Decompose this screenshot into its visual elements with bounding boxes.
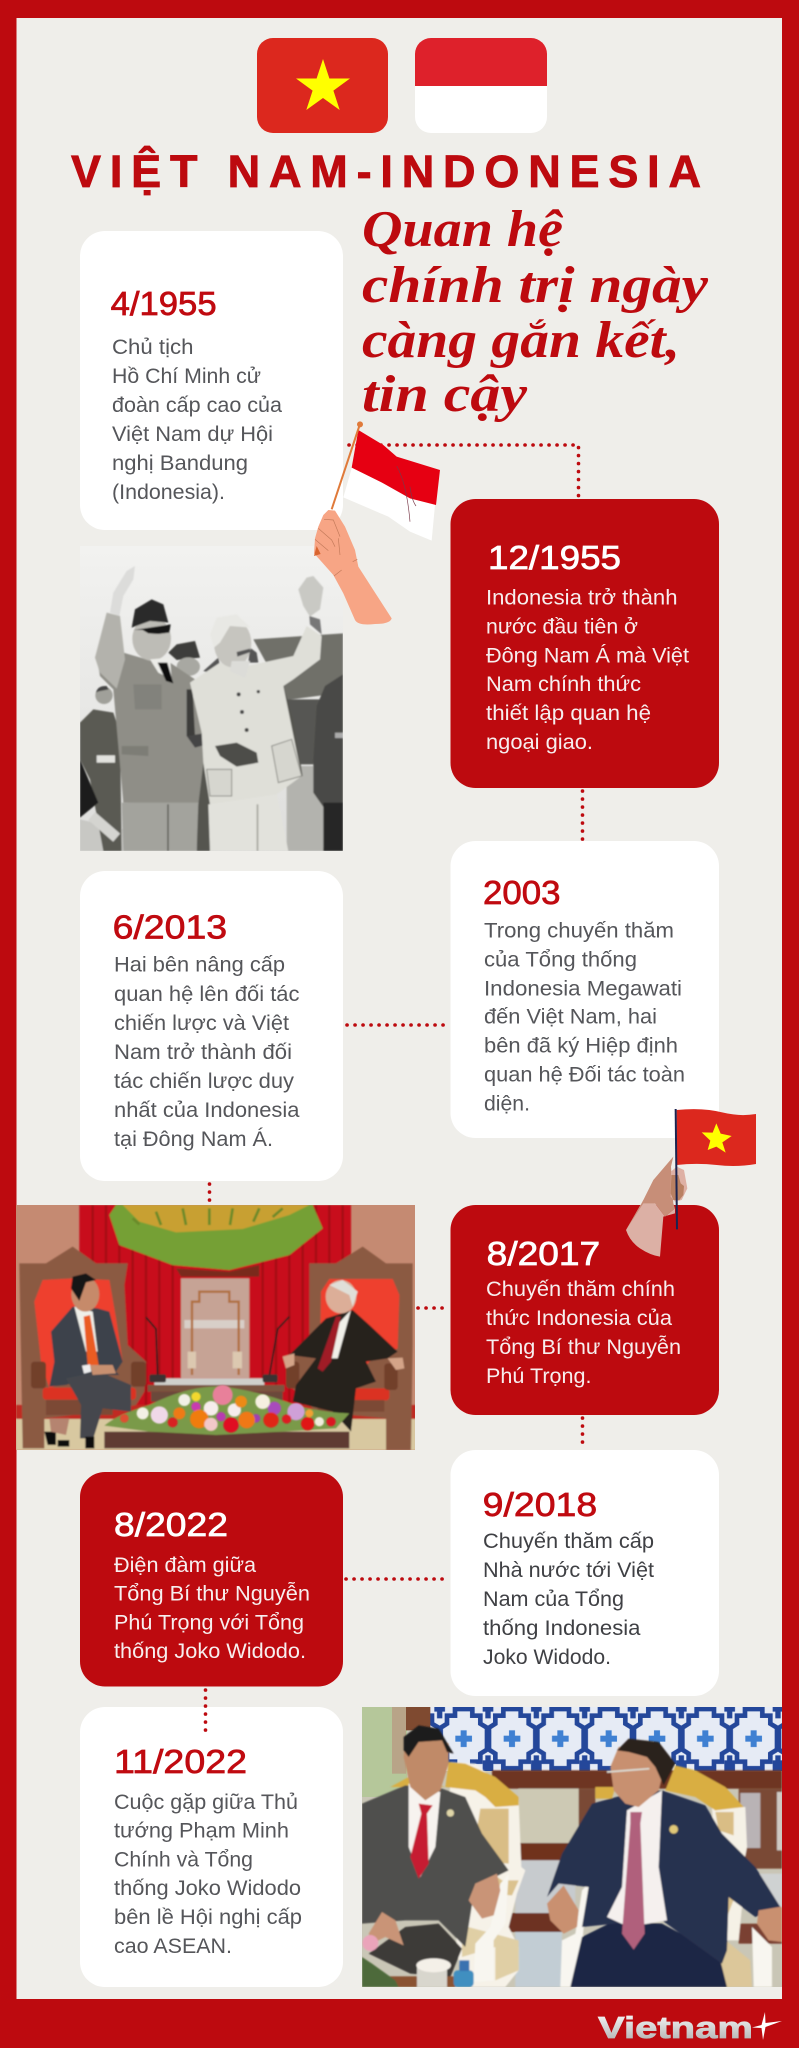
panel: 6/2013 [80, 871, 343, 1181]
text 4/1955: (Indonesia). [112, 481, 225, 504]
date 9/2018: 9/2018 [483, 1486, 597, 1523]
logo: Vietnam+ [598, 2010, 782, 2045]
right man [289, 1310, 398, 1432]
text 11/2022: thống Joko Widodo [114, 1877, 301, 1900]
table and items [148, 1385, 284, 1392]
text 11/2022: tướng Phạm Minh [114, 1820, 289, 1842]
subtitle: Quan hệ [362, 201, 564, 258]
illustration: hand holding Vietnam flag [626, 1109, 756, 1257]
table items [375, 1976, 455, 1987]
text 4/1955: nghị Bandung [112, 452, 248, 475]
left man [49, 1307, 123, 1387]
text 8/2022: Điện đàm giữa [114, 1554, 256, 1577]
text 8/2017: thức Indonesia của [486, 1307, 672, 1330]
text 11/2022: Chính và Tổng [114, 1848, 253, 1872]
text 12/1955: nước đầu tiên ở [486, 616, 638, 638]
text 11/2022: Cuộc gặp giữa Thủ [114, 1791, 298, 1814]
text 4/1955: Việt Nam dự Hội [112, 423, 273, 446]
text 4/1955: đoàn cấp cao của [112, 394, 282, 417]
text 2003 [484, 920, 685, 1116]
text 6/2013 [114, 954, 300, 1151]
text 12/1955: Nam chính thức [486, 673, 641, 696]
left chair [449, 1762, 525, 1987]
panel: 2003 [450, 841, 719, 1138]
logo: Vietnam+: Vietnam [598, 2010, 753, 2045]
text 6/2013: quan hệ lên đối tác [114, 983, 300, 1006]
photo: Sukarno and Ho Chi Minh waving [80, 546, 343, 851]
text 9/2018: Nam của Tổng [483, 1588, 624, 1611]
date 2003: 2003 [483, 874, 560, 911]
photo: Joko Widodo and Nguyen Phu Trong seated [16, 1205, 416, 1450]
date 12/1955: 12/1955 [488, 539, 621, 576]
subtitle: chính trị ngày [362, 257, 709, 314]
connector: 6/2013 to photo [208, 1184, 211, 1201]
text 6/2013: Hai bên nâng cấp [114, 954, 285, 976]
text 8/2022 [114, 1554, 310, 1663]
text 8/2017 [486, 1278, 681, 1388]
panel: 8/2017 [450, 1205, 719, 1415]
icon: plus [752, 2012, 782, 2040]
text 9/2018: Nhà nước tới Việt [483, 1559, 654, 1582]
text 6/2013: Nam trở thành đối [114, 1041, 292, 1064]
illustration: hand holding Indonesia flag [314, 421, 440, 624]
text 8/2017: Tổng Bí thư Nguyễn [486, 1336, 681, 1359]
text 12/1955 [486, 586, 689, 754]
date 11/2022: 11/2022 [114, 1743, 247, 1780]
text 2003: Trong chuyến thăm [484, 920, 674, 942]
subtitle: càng gắn kết, [362, 312, 680, 369]
text 8/2022: Phú Trọng với Tổng [114, 1612, 304, 1634]
text 2003: quan hệ Đối tác toàn [484, 1064, 685, 1086]
icon: Indonesia flag [415, 38, 547, 133]
text 2003: diện. [484, 1092, 530, 1116]
text 2003: đến Việt Nam, hai [484, 1006, 657, 1028]
right chair [712, 1807, 747, 1940]
text 2003: của Tổng thống [484, 948, 637, 972]
text 11/2022: cao ASEAN. [114, 1935, 232, 1958]
icon: Vietnam flag [257, 38, 388, 133]
text 8/2017: Chuyến thăm chính [486, 1278, 675, 1301]
connector: 6/2013 to 2003 [347, 1023, 447, 1027]
date 8/2022: 8/2022 [114, 1506, 228, 1543]
panel: 12/1955 [450, 499, 719, 788]
text 8/2022: thống Joko Widodo. [114, 1640, 306, 1663]
text 4/1955: Chủ tịch [112, 336, 194, 359]
text 6/2013: chiến lược và Việt [114, 1012, 289, 1035]
panel: 4/1955 [80, 231, 343, 530]
text 12/1955: ngoại giao. [486, 731, 593, 754]
panel: 9/2018 [450, 1450, 719, 1696]
text 9/2018: Joko Widodo. [483, 1646, 611, 1669]
text 12/1955: thiết lập quan hệ [486, 702, 651, 725]
panel: 11/2022 [80, 1707, 343, 1987]
connector: 8/2022 to 9/2018 [346, 1577, 450, 1581]
text 4/1955 [112, 336, 282, 504]
date 4/1955: 4/1955 [111, 285, 217, 322]
subtitle: tin cậy [362, 366, 528, 423]
text 2003: Indonesia Megawati [484, 978, 682, 1000]
connector: top dotted line [349, 445, 578, 498]
connector: 12/1955 to 2003 [581, 791, 584, 841]
connector: 8/2022 to 11/2022 [204, 1690, 207, 1731]
connector: photo to 8/2017 [418, 1306, 447, 1310]
text 6/2013: tại Đông Nam Á. [114, 1128, 273, 1151]
panel: 8/2022 [80, 1472, 343, 1686]
subtitle [362, 201, 709, 423]
date 6/2013: 6/2013 [113, 908, 227, 946]
text 12/1955: Indonesia trở thành [486, 586, 678, 610]
text 9/2018: Chuyến thăm cấp [483, 1530, 654, 1553]
text 6/2013: nhất của Indonesia [114, 1099, 300, 1122]
text 6/2013: tác chiến lược duy [114, 1070, 295, 1093]
date 8/2017: 8/2017 [487, 1235, 600, 1272]
title: VIỆT NAM-INDONESIA [71, 146, 701, 197]
text 2003: bên đã ký Hiệp định [484, 1034, 678, 1058]
text 11/2022: bên lề Hội nghị cấp [114, 1906, 302, 1929]
right man [570, 1920, 727, 1987]
connector: 8/2017 to 9/2018 [581, 1418, 584, 1449]
text 9/2018 [483, 1530, 654, 1669]
text 11/2022 [114, 1791, 302, 1958]
text 8/2022: Tổng Bí thư Nguyễn [114, 1582, 310, 1606]
text 12/1955: Đông Nam Á mà Việt [486, 644, 689, 668]
text 4/1955: Hồ Chí Minh cử [112, 365, 261, 388]
text 8/2017: Phú Trọng. [486, 1365, 592, 1388]
photo: Joko Widodo and Pham Minh Chinh [362, 1707, 782, 1987]
text 9/2018: thống Indonesia [483, 1617, 641, 1640]
left man [369, 1924, 462, 1977]
